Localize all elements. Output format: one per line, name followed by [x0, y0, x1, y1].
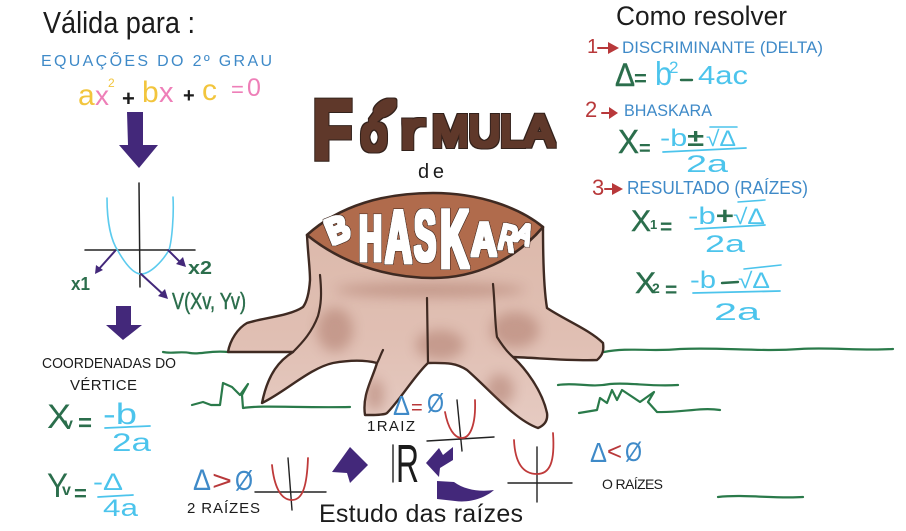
formula: x2: √Δ — [738, 268, 770, 293]
illustration: tree stump — [228, 192, 603, 428]
formula: x2: 2a — [714, 299, 761, 326]
case: delta greater than zero: Δ — [193, 464, 211, 497]
word in stump: BHASKARA: R — [495, 216, 521, 260]
label: vertex: V(Xv, Yv) — [172, 288, 246, 314]
arrow: down to vertex coordinates — [106, 306, 142, 340]
step 2: bhaskara — [585, 97, 713, 122]
heading: Válida para: Válida para : — [43, 5, 195, 40]
formula: Xv: -b — [103, 398, 137, 431]
equation: general quadratic: 2 — [108, 76, 115, 90]
formula: x: -b± — [660, 125, 704, 152]
formula: x2: 2 — [652, 280, 660, 296]
stump shading — [317, 283, 539, 411]
formula: x — [618, 123, 746, 178]
formula: x: 2a — [686, 151, 729, 178]
arrow: down to graph — [119, 112, 158, 168]
formula: Yv: = — [74, 481, 87, 506]
formula: x2: = — [665, 279, 677, 302]
case: delta greater than zero: Ø — [235, 465, 253, 496]
title: Fórmula: ó — [361, 108, 387, 161]
formula: Xv: v — [64, 416, 73, 433]
label: x2: x2 — [188, 258, 212, 278]
formula: Yv: v — [62, 482, 71, 499]
equation: general quadratic: = — [231, 77, 244, 102]
heading: coordenadas do vértice: VÉRTICE — [70, 377, 137, 394]
word in stump: BHASKARA — [320, 192, 538, 286]
formula: Yv — [47, 467, 139, 522]
case: delta greater than zero — [187, 458, 326, 517]
word in stump: BHASKARA: A — [512, 217, 538, 251]
case: delta equals zero — [367, 388, 494, 451]
stump top cut — [307, 193, 543, 278]
arrow: curved into R — [437, 481, 494, 501]
formula: Xv: 2a — [112, 429, 151, 457]
stump body — [228, 227, 603, 428]
case: delta greater than zero: > — [212, 465, 232, 496]
formula: Yv: 4a — [103, 495, 139, 522]
formula: x2: -b — [690, 267, 716, 294]
formula: Xv: = — [78, 410, 92, 437]
equation: general quadratic: a — [78, 79, 95, 112]
panel: validity (left column) — [41, 5, 272, 522]
panel: study of the roots — [187, 388, 663, 528]
formula: x1: -b + — [688, 203, 734, 230]
formula: Yv: Y — [47, 467, 68, 505]
case: delta less than zero: < — [607, 436, 622, 466]
step 3: resultado — [592, 175, 808, 200]
case: delta less than zero — [508, 433, 663, 502]
formula: delta: 2 — [669, 58, 678, 77]
formula: x: X — [618, 123, 639, 160]
heading: coordenadas do vértice: COORDENADAS DO — [42, 355, 176, 372]
case: delta equals zero: Δ — [393, 390, 410, 421]
title: Fórmula: MULA — [432, 107, 555, 156]
case: delta less than zero: Ø — [625, 437, 642, 467]
formula: x1: 1 — [650, 217, 657, 232]
case: delta less than zero: Δ — [590, 437, 607, 468]
formula: x2: X — [635, 267, 656, 300]
case: delta less than zero: O RAÍZES — [602, 476, 663, 492]
case: delta greater than zero: 2 RAÍZES — [187, 500, 260, 517]
title: Fórmula: F — [313, 83, 352, 177]
word in stump: BHASKARA: K — [440, 192, 469, 286]
formula: x1: X — [631, 205, 651, 238]
equation: general quadratic: x — [95, 80, 109, 111]
formula: delta: 4ac — [698, 60, 748, 90]
case: delta equals zero: 1RAIZ — [367, 418, 415, 435]
step 1: discriminante: 1 — [587, 36, 598, 58]
case: delta equals zero: Ø — [427, 388, 444, 418]
equation: general quadratic: + — [183, 85, 195, 107]
heading: coordenadas do vértice — [42, 355, 176, 394]
equation: general quadratic: x — [159, 77, 174, 109]
word in stump: BHASKARA: B — [320, 206, 355, 252]
step 3: resultado: RESULTADO (RAÍZES) — [627, 178, 808, 198]
heading: estudo das raízes: Estudo das raízes — [319, 500, 523, 528]
arrow: into R from left — [332, 447, 368, 483]
formula: Xv — [47, 398, 151, 457]
panel: how to solve (right column) — [585, 1, 823, 326]
word in stump: BHASKARA: A — [385, 195, 412, 280]
ground grass lines — [163, 348, 893, 497]
symbol: real numbers — [393, 434, 419, 494]
text: de: de — [418, 161, 444, 183]
equation: general quadratic: + — [122, 86, 135, 111]
formula: x1 — [631, 200, 765, 258]
title: Fórmula — [313, 83, 555, 177]
root lines — [293, 275, 513, 363]
formula: x1: 2a — [705, 231, 746, 258]
word in stump: BHASKARA: A — [471, 214, 497, 267]
formula: delta: b — [655, 55, 672, 92]
word in stump: BHASKARA: S — [414, 197, 436, 277]
step 1: discriminante: DISCRIMINANTE (DELTA) — [622, 38, 823, 57]
equation: general quadratic: c — [202, 74, 217, 107]
formula: Yv: -Δ — [93, 469, 123, 496]
formula: delta: Δ — [615, 57, 635, 93]
formula: x: √Δ — [706, 126, 736, 151]
title: Fórmula: r — [399, 102, 425, 160]
formula: delta — [615, 55, 748, 93]
step 2: bhaskara: BHASKARA — [624, 101, 713, 120]
formula: x: = — [639, 138, 651, 160]
word in stump: BHASKARA: H — [359, 201, 382, 275]
formula: delta: = — [634, 66, 647, 91]
chart: parabola with roots and vertex — [71, 183, 246, 314]
equation: general quadratic: b — [142, 76, 159, 109]
case: delta equals zero: = — [411, 397, 423, 419]
formula: x1: √Δ — [733, 204, 765, 229]
formula: Xv: X — [47, 398, 71, 436]
symbol: real numbers: R — [396, 434, 419, 494]
label: x1: x1 — [71, 274, 90, 294]
step 2: bhaskara: 2 — [585, 97, 597, 122]
equation: general quadratic — [78, 74, 261, 112]
formula: x2 — [635, 265, 781, 326]
equation: general quadratic: 0 — [247, 74, 261, 102]
heading: Como resolver: Como resolver — [616, 1, 787, 31]
step 3: resultado: 3 — [592, 175, 604, 200]
arrow: into R from right — [426, 447, 453, 477]
text: equações do 2º grau: EQUAÇÕES DO 2º GRAU — [41, 50, 272, 70]
formula: x1: = — [660, 216, 672, 239]
